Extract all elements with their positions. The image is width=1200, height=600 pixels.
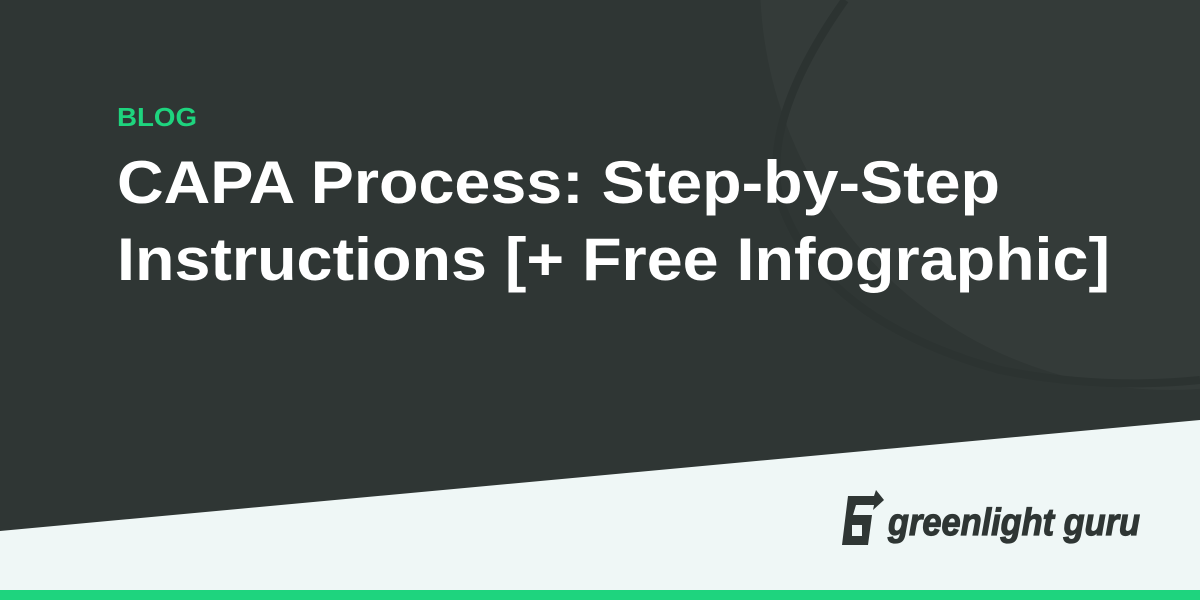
logo: greenlight guru xyxy=(842,490,1140,545)
decorative arcs xyxy=(760,0,1200,390)
logo: greenlight guru: greenlight guru xyxy=(887,502,1140,544)
icon: logo mark xyxy=(842,490,884,545)
title: Instructions [+ Free Infographic] xyxy=(117,226,1110,293)
title xyxy=(117,149,1110,293)
light bottom panel xyxy=(0,420,1200,600)
category label: BLOG xyxy=(117,102,197,132)
green bottom bar xyxy=(0,590,1200,600)
title: CAPA Process: Step-by-Step xyxy=(117,149,1000,216)
